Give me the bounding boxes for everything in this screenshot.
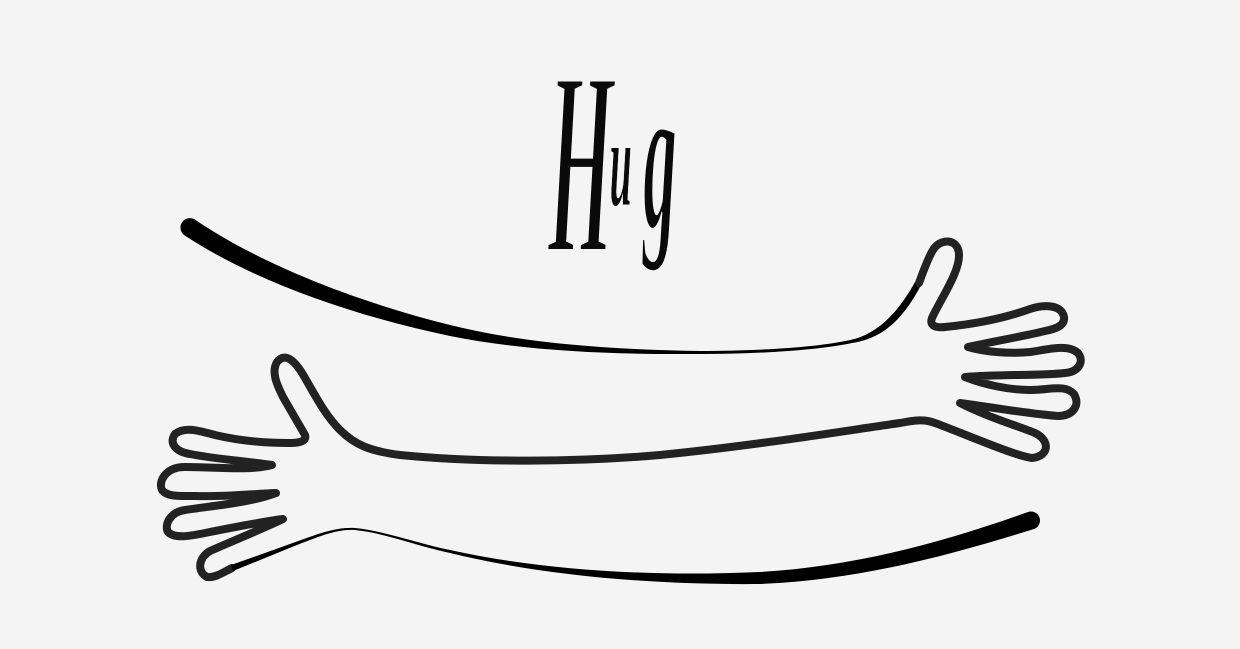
title: Hug: H	[547, 16, 616, 310]
arms and hands outline	[161, 241, 1081, 577]
upper arm: tapered stroke	[180, 218, 921, 354]
title: Hug: g	[642, 40, 677, 273]
lower arm: tapered stroke	[231, 511, 1040, 584]
title: Hug: u	[610, 95, 632, 233]
